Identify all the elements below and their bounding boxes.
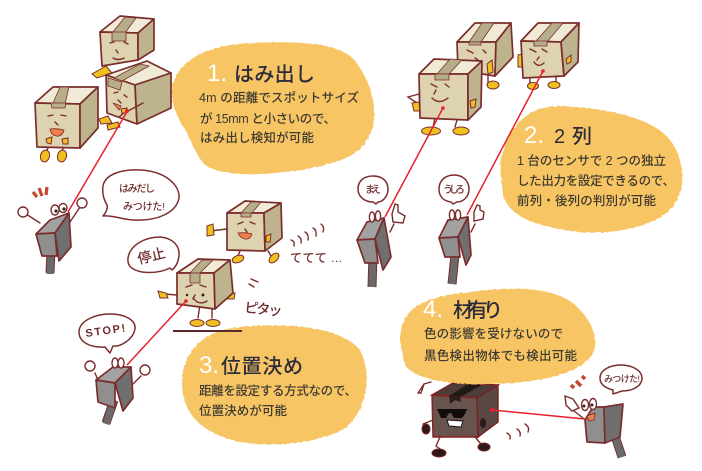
panel: 2 2列 xyxy=(500,106,682,233)
heading: 2 2列: 2 列 xyxy=(554,125,592,148)
text block: 1 description: 4m の距離でスポットサイズ xyxy=(199,90,359,105)
box character: front right xyxy=(99,61,171,130)
laser dot: 2 rear xyxy=(541,69,545,73)
heading: 3 位置決め: 3. xyxy=(199,352,219,379)
speech bubble: みつけた: みつけた! xyxy=(604,374,640,384)
heading: 1 はみ出し: 1. xyxy=(207,60,227,87)
ground line xyxy=(173,330,242,332)
speech bubble: STOP xyxy=(79,314,135,353)
heading: 1 はみ出し: はみ出し xyxy=(234,63,315,86)
speech bubble: 停止: 停止 xyxy=(136,245,167,267)
text block: 2 description: 前列・後列の判別が可能 xyxy=(517,193,656,208)
box character: stopped xyxy=(158,259,235,326)
text block: 2 description: 1 台のセンサで 2 つの独立 xyxy=(517,153,666,168)
text block: 4 description: 色の影響を受けないので xyxy=(424,326,563,341)
laser dot: 1 xyxy=(125,109,129,113)
heading: 4 材有り: 4. xyxy=(423,296,443,323)
text block: 4 description xyxy=(424,326,577,363)
heading: 2 2列: 2. xyxy=(524,122,544,149)
box character: back row A xyxy=(457,23,513,89)
box character: back row B xyxy=(518,23,579,90)
text block: 2 description xyxy=(517,153,675,208)
heading: 4 材有り xyxy=(423,296,503,323)
heading: 3 位置決め: 位置決め xyxy=(221,355,303,378)
heading: 3 位置決め xyxy=(199,352,303,379)
speech bubble: はみだしみつけた: はみだし xyxy=(119,183,155,195)
sensor: 3 xyxy=(85,358,150,424)
panel: 4 材有り xyxy=(400,289,595,384)
speech bubble: はみだしみつけた xyxy=(103,170,179,220)
speech bubble: 停止 xyxy=(128,237,179,273)
motion marks and text: てててて xyxy=(290,224,342,265)
laser: 3 xyxy=(127,301,186,365)
marks and text: ピタッ xyxy=(244,279,283,319)
sensor: 4 xyxy=(565,376,623,457)
speech bubble: まえ xyxy=(358,176,388,204)
speech bubble: みつけた xyxy=(600,365,642,394)
speech bubble: はみだしみつけた: みつけた! xyxy=(123,201,165,213)
laser dot: 3 xyxy=(184,299,188,303)
text block: 3 description: 位置決めが可能 xyxy=(199,403,287,418)
box character: front left xyxy=(35,87,98,163)
laser: 2 front xyxy=(385,108,443,217)
sensor: 2 front xyxy=(357,204,405,287)
marks and text: ピタッ: ピタッ xyxy=(244,299,283,319)
box character: moving xyxy=(207,201,282,265)
sensor: 1 xyxy=(18,187,87,274)
motion marks and text: てててて: ててて ... xyxy=(290,251,342,265)
speech bubble: うしろ xyxy=(439,175,469,204)
box character: front row xyxy=(408,59,482,135)
text block: 3 description xyxy=(199,383,357,418)
laser: 1 xyxy=(68,110,128,212)
box character: black box with sunglasses xyxy=(422,383,498,457)
laser dot: 4 xyxy=(490,408,494,412)
heading: 4 材有り: 材有り xyxy=(453,299,503,322)
text block: 1 description xyxy=(199,90,359,145)
laser dot: 2 front xyxy=(441,106,445,110)
text block: 3 description: 距離を設定する方式なので、 xyxy=(199,383,357,398)
speech bubble: まえ: まえ xyxy=(365,184,381,196)
text block: 2 description: した出力を設定できるので、 xyxy=(517,174,675,188)
speech bubble: うしろ: うしろ xyxy=(443,184,465,196)
text block: 4 description: 黒色検出物体でも検出可能 xyxy=(424,348,577,363)
speech bubble: STOP: STOP! xyxy=(85,323,126,340)
heading: 2 2列 xyxy=(524,122,592,149)
laser: 4 xyxy=(492,410,585,419)
text block: 1 description: が 15mm と小さいので、 xyxy=(200,111,336,126)
panel: 1 はみ出し xyxy=(172,42,374,174)
laser: 2 rear xyxy=(467,71,543,215)
text block: 1 description: はみ出し検知が可能 xyxy=(200,130,314,145)
sensor: 2 rear xyxy=(439,205,484,284)
music note xyxy=(418,382,431,393)
box character: top centre xyxy=(92,16,154,78)
heading: 1 はみ出し xyxy=(207,60,315,87)
motion marks xyxy=(507,424,529,439)
panel: 3 位置決め xyxy=(182,325,367,444)
